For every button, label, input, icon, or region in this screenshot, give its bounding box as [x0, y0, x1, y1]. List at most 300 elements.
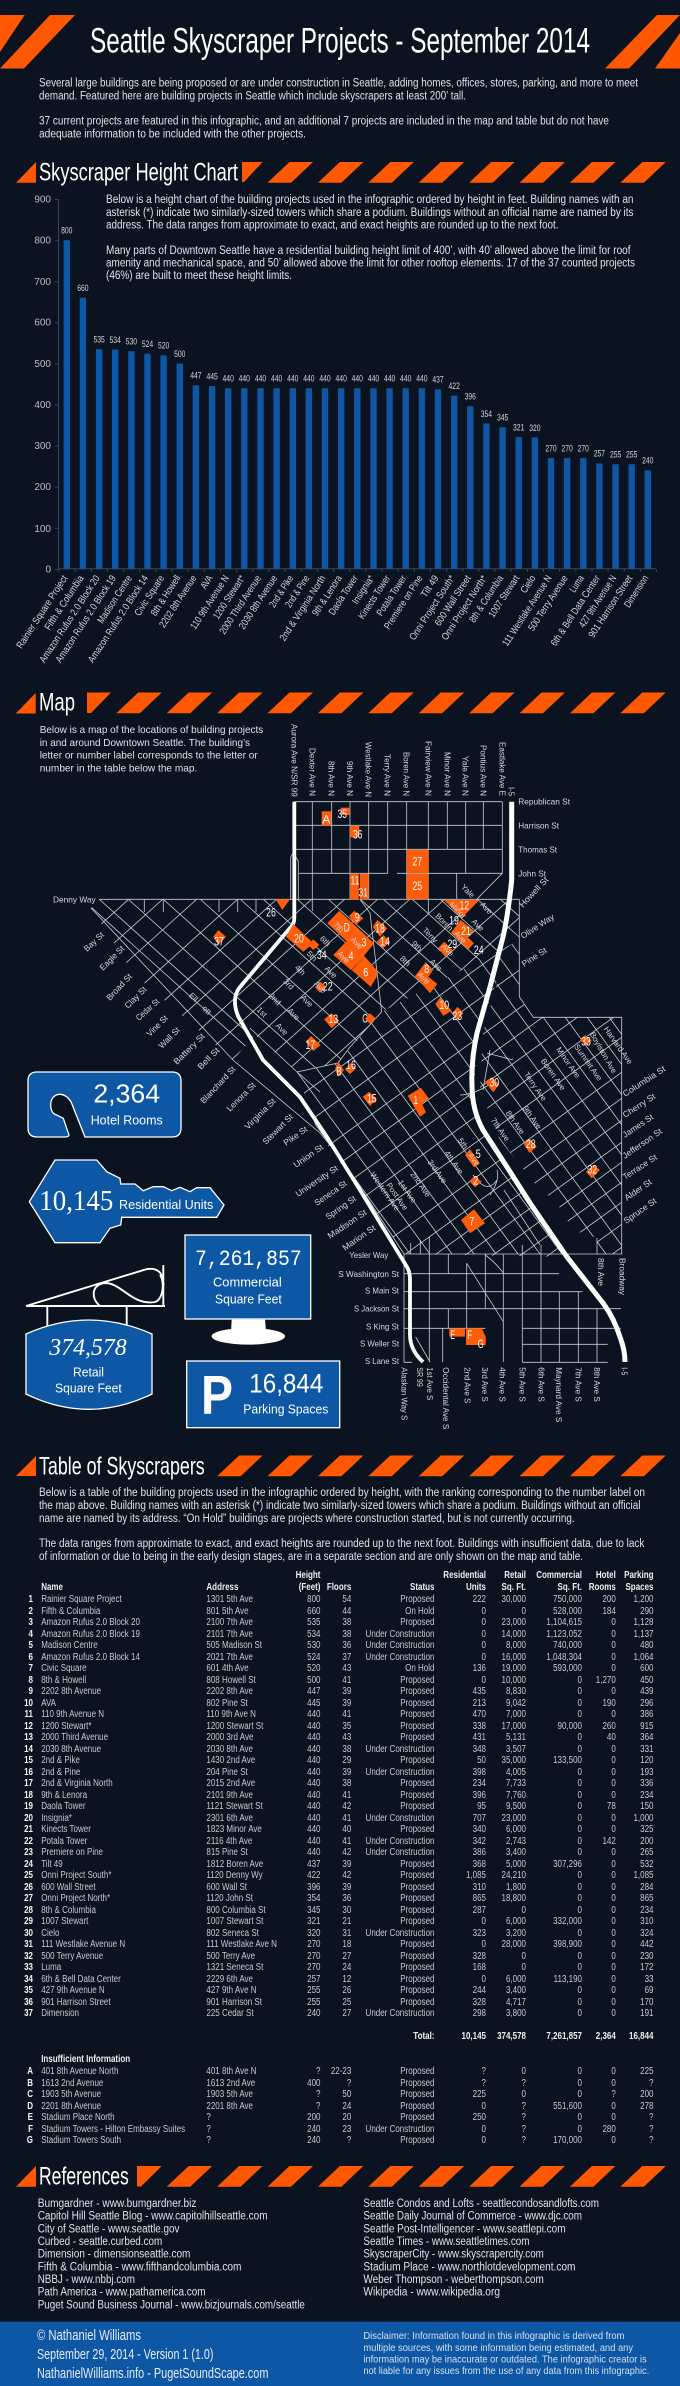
table rows: 37 ranked projects: 534 [307, 1628, 320, 1640]
table rows: 37 ranked projects: 120 [640, 1755, 654, 1766]
rotated project names: 1007 Stewart [487, 573, 522, 620]
table rows: 37 ranked projects: 440 [307, 1801, 320, 1812]
table rows: 37 ranked projects: 332,000 [553, 1916, 582, 1927]
table rows: insufficient information projects: 0 [611, 2112, 616, 2123]
table rows: insufficient information projects: Stadium Towers - Hilton Embassy Suites [41, 2124, 185, 2135]
table rows: 37 ranked projects: Proposed [400, 1755, 434, 1766]
table rows: insufficient information projects: 250 [473, 2112, 486, 2123]
project number labels: 18 [375, 921, 385, 935]
table rows: 37 ranked projects: 801 5th Ave [206, 1606, 249, 1616]
north street labels [289, 724, 571, 969]
avenue labels along the grid: Ave [312, 979, 328, 996]
table rows: 37 ranked projects: 24 [342, 1962, 351, 1973]
table rows: 37 ranked projects: 440 [307, 1732, 320, 1743]
south street labels: I-5 [619, 1367, 629, 1376]
table rows: 37 ranked projects: 0 [611, 1882, 616, 1892]
street grid [90, 801, 622, 1363]
table rows: 37 ranked projects: 1,123,052 [546, 1628, 582, 1640]
bar value labels: 440 [336, 374, 347, 384]
y axis [34, 194, 58, 576]
section heading: table: Table of Skyscrapers [39, 1452, 205, 1480]
table rows: 37 ranked projects: 30,000 [502, 1594, 526, 1605]
table rows: 37 ranked projects: 600 Wall St [206, 1882, 247, 1892]
table rows: 37 ranked projects: On Hold [405, 1606, 434, 1616]
table rows: 37 ranked projects: 1,270 [596, 1674, 616, 1686]
west street labels: Bell St [195, 1045, 222, 1071]
table header row: Residential [443, 1570, 486, 1581]
table rows: 37 ranked projects: 255 [307, 1985, 320, 1996]
stat: hotel rooms door hanger: Hotel Rooms [91, 1112, 163, 1127]
table rows: 37 ranked projects: 23,000 [502, 1812, 526, 1824]
rotated project names: 1200 Stewart* [211, 574, 248, 622]
table rows: 37 ranked projects: 0 [611, 1824, 616, 1835]
bar chart: skyscraper heights [15, 194, 657, 665]
table rows: 37 ranked projects: 2301 6th Ave [206, 1812, 253, 1824]
table header row: Parking [624, 1570, 654, 1581]
table rows: 37 ranked projects: 15 [24, 1755, 33, 1766]
rotated project names: 9th & Lenora [310, 573, 345, 618]
stat: retail square feet sign: Square Feet [55, 1381, 122, 1396]
project number labels: 33 [581, 1035, 591, 1049]
south street labels: 5th Ave S [517, 1367, 527, 1402]
table rows: 37 ranked projects: 0 [611, 1778, 616, 1789]
table rows: 37 ranked projects: 1,104,615 [546, 1617, 582, 1628]
table rows: 37 ranked projects: 38 [342, 1617, 351, 1628]
table rows: 37 ranked projects: 8th & Columbia [41, 1904, 96, 1916]
project number labels: A [322, 812, 330, 826]
stat: parking spaces sign: P [201, 1364, 233, 1426]
north street labels: Westlake Ave N [364, 742, 374, 797]
north street labels: Aurora Ave N/SR 99 [289, 724, 299, 797]
project number labels: D [344, 920, 350, 934]
stat: commercial square feet monitor: Commercial [213, 1275, 282, 1290]
table rows: insufficient information projects: 0 [522, 2089, 526, 2100]
table rows: 37 ranked projects: 1,128 [633, 1617, 654, 1628]
table rows: 37 ranked projects: 535 [307, 1617, 320, 1628]
avenue labels along the grid: Summit Ave [572, 1043, 604, 1083]
project number labels: 30 [489, 1076, 499, 1090]
table rows: 37 ranked projects: 2000 Third Avenue [41, 1732, 108, 1743]
table rows: 37 ranked projects: AVA [41, 1698, 56, 1708]
table rows: 37 ranked projects: 39 [342, 1686, 351, 1697]
table rows: 37 ranked projects: 435 [473, 1686, 486, 1697]
table rows: 37 ranked projects: 440 [307, 1836, 320, 1846]
bar value labels: 535 [93, 334, 105, 345]
west street labels: S Washington St [338, 1269, 400, 1279]
table rows: 37 ranked projects: 500 [307, 1674, 320, 1686]
table rows: 37 ranked projects: 41 [342, 1790, 351, 1800]
rotated project names: 2030 8th Avenue [237, 573, 280, 632]
table rows: 37 ranked projects: 2100 7th Ave [206, 1617, 253, 1628]
table rows: 37 ranked projects: 0 [578, 1812, 582, 1824]
table rows: 37 ranked projects: Proposed [400, 1686, 434, 1697]
table rows: 37 ranked projects: 19,000 [502, 1663, 526, 1674]
footer credits: © Nathaniel Williams [37, 2327, 141, 2344]
table header row: Sq. Ft. [558, 1582, 582, 1593]
table rows: 37 ranked projects: 0 [611, 1744, 616, 1754]
table rows: 37 ranked projects: 1812 Boren Ave [206, 1858, 263, 1870]
table rows: insufficient information projects: G [27, 2135, 33, 2146]
south street labels [399, 1367, 629, 1430]
project number labels: E [450, 1328, 455, 1342]
table rows: 37 ranked projects: 225 Cedar St [206, 2008, 254, 2019]
table rows: 37 ranked projects: 29 [24, 1916, 33, 1927]
table rows: 37 ranked projects: 0 [611, 1893, 616, 1904]
table rows: 37 ranked projects: 7,760 [506, 1790, 526, 1800]
table rows: 37 ranked projects: Under Construction [366, 1928, 434, 1938]
table rows: 37 ranked projects: 20 [24, 1812, 33, 1824]
avenue labels along the grid: Boylston Ave [588, 1031, 619, 1075]
footer disclaimer: multiple sources, with some information being estimated, and any [363, 2342, 634, 2354]
table rows: 37 ranked projects: 2,743 [506, 1836, 526, 1846]
table subheading: insufficient information: Insufficient Information [41, 2054, 130, 2065]
table rows: 37 ranked projects: 901 Harrison Street [41, 1996, 111, 2008]
bar value labels: 422 [449, 381, 460, 392]
table rows: 37 ranked projects: 0 [578, 1790, 582, 1800]
table rows: insufficient information projects: 0 [578, 2124, 582, 2135]
avenue labels along the grid: Terry [421, 926, 440, 945]
table rows: 37 ranked projects: 600 [640, 1663, 654, 1674]
table rows: insufficient information projects: ? [206, 2135, 211, 2146]
y axis: 0 [45, 564, 51, 576]
table rows: 37 ranked projects: 0 [482, 1916, 486, 1927]
table rows: insufficient information projects: ? [649, 2124, 654, 2135]
table rows: 37 ranked projects: 528,000 [553, 1606, 582, 1616]
table rows: insufficient information projects: Proposed [400, 2089, 434, 2100]
rotated project names: Potala Tower [375, 573, 410, 618]
table rows: 37 ranked projects: 3,200 [506, 1928, 526, 1938]
rotated project names: Insignia* [350, 574, 377, 606]
north street labels: Republican St [518, 797, 571, 807]
table rows: insufficient information projects: 401 8th Ave N [206, 2066, 257, 2077]
bar value labels: 440 [400, 374, 411, 384]
bar value labels: 440 [352, 374, 363, 384]
table rows: 37 ranked projects: 601 4th Ave [206, 1663, 249, 1674]
table rows: 37 ranked projects: 234 [473, 1778, 486, 1789]
table rows: 37 ranked projects: 28 [24, 1904, 33, 1916]
intro text [39, 78, 639, 140]
project number labels: 13 [328, 1012, 338, 1026]
south street labels: 3rd Ave S [480, 1367, 490, 1402]
bar value labels: 440 [223, 374, 234, 384]
table rows: 37 ranked projects: 111 Westlake Ave N [206, 1939, 277, 1950]
table rows: 37 ranked projects: 22 [24, 1836, 33, 1846]
table rows: 37 ranked projects: 0 [482, 1617, 486, 1628]
table rows: 37 ranked projects: 2202 8th Avenue [41, 1686, 101, 1697]
map description text: Below is a map of the locations of building projects [40, 724, 263, 736]
intro text: 37 current projects are featured in this infographic, and an additional 7 projects are included in the map and table but do not have [39, 116, 609, 128]
table rows: 37 ranked projects: 26 [24, 1882, 33, 1892]
table rows: 37 ranked projects: Amazon Rufus 2.0 Block 14 [41, 1652, 140, 1662]
north street labels: Yale Ave N [461, 756, 471, 796]
table rows: 37 ranked projects: 1200 Stewart* [41, 1720, 91, 1732]
table rows: insufficient information projects: ? [316, 2066, 320, 2077]
project number labels: 1 [413, 1093, 418, 1107]
project number labels: 3 [362, 936, 367, 950]
stat: parking spaces sign: 16,844 [249, 1369, 323, 1399]
table rows: 37 ranked projects: Proposed [400, 1858, 434, 1870]
avenue labels along the grid: Ave [452, 929, 468, 946]
avenue labels along the grid: Ave [439, 942, 456, 959]
table header row: Retail [504, 1570, 526, 1581]
table rows: insufficient information projects: ? [206, 2124, 211, 2135]
bar value labels: 660 [77, 283, 89, 294]
east street labels: Alder St [622, 1176, 654, 1203]
table rows: insufficient information projects: 24 [342, 2101, 351, 2112]
table rows: 37 ranked projects: 39 [342, 1858, 351, 1870]
table totals row: 10,145 [462, 2031, 486, 2042]
table rows: 37 ranked projects: 8 [29, 1674, 33, 1686]
table rows: 37 ranked projects: 422 [307, 1870, 320, 1881]
table header row: Units [466, 1582, 486, 1593]
table rows: 37 ranked projects: 23,000 [502, 1617, 526, 1628]
table rows: 37 ranked projects: 18 [342, 1939, 351, 1950]
avenue labels along the grid: 3rd Ave [426, 1158, 449, 1186]
avenue labels along the grid [187, 883, 635, 1213]
avenue labels along the grid: Terry Ave [522, 1070, 549, 1103]
table rows: 37 ranked projects: Under Construction [366, 1847, 434, 1858]
table rows: 37 ranked projects: 244 [473, 1985, 486, 1996]
rotated project names: Madison Centre [96, 573, 135, 626]
table rows: insufficient information projects: 240 [307, 2124, 320, 2135]
y axis: 200 [34, 482, 51, 493]
table rows: insufficient information projects: Proposed [400, 2078, 434, 2089]
references right column: SkyscraperCity - www.skyscrapercity.com [363, 2249, 544, 2261]
table rows: insufficient information projects: 0 [578, 2089, 582, 2100]
south street labels: Alaskan Way S [399, 1367, 409, 1421]
table rows: 37 ranked projects: 440 [307, 1720, 320, 1732]
table rows: 37 ranked projects: 34 [24, 1974, 33, 1984]
stat: retail square feet sign: Retail [73, 1365, 104, 1380]
table rows: 37 ranked projects: 168 [473, 1962, 486, 1973]
project number labels: 5 [476, 1147, 481, 1161]
table rows: 37 ranked projects: 35 [342, 1720, 351, 1732]
avenue labels along the grid: Harvard Ave [602, 1025, 635, 1067]
table rows: 37 ranked projects: 27 [342, 2008, 351, 2019]
section heading: table [16, 1452, 666, 1480]
intro text: adequate information to be included with the other projects. [39, 128, 306, 140]
stat: retail square feet sign: 374,578 [48, 1335, 127, 1361]
avenue labels along the grid: Ave [415, 970, 432, 987]
table rows: 37 ranked projects: 111 Westlake Avenue N [41, 1939, 125, 1950]
table rows: 37 ranked projects: Amazon Rufus 2.0 Block 19 [41, 1628, 140, 1640]
table rows: 37 ranked projects: 37 [342, 1652, 351, 1662]
bar value labels [61, 226, 653, 467]
table rows: 37 ranked projects: 2 [29, 1606, 33, 1616]
table rows: 37 ranked projects: 6 [29, 1652, 33, 1662]
table rows: 37 ranked projects: Cielo [41, 1928, 59, 1938]
avenue labels along the grid: ott [200, 1004, 214, 1017]
south street labels: 8th Ave S [592, 1367, 602, 1402]
section heading: height chart [16, 158, 666, 186]
rotated project names: 111 Westlake Avenue N [501, 574, 555, 648]
table rows: 37 ranked projects: 0 [611, 1939, 616, 1950]
bar value labels: 257 [594, 449, 605, 460]
table rows: 37 ranked projects: 398 [473, 1766, 486, 1778]
table rows: 37 ranked projects: 41 [342, 1709, 351, 1720]
table rows: 37 ranked projects: Under Construction [366, 1652, 434, 1662]
references right column [363, 2198, 599, 2299]
table rows: 37 ranked projects: 0 [578, 1893, 582, 1904]
bar value labels: 240 [642, 456, 653, 467]
avenue labels along the grid: Minor [448, 900, 468, 921]
table rows: 37 ranked projects: 5,000 [506, 1858, 526, 1870]
table rows: 37 ranked projects: Proposed [400, 1594, 434, 1605]
table rows: 37 ranked projects: 1,000 [633, 1812, 654, 1824]
table rows: insufficient information projects: 400 [307, 2078, 320, 2089]
table rows: insufficient information projects: 225 [473, 2089, 486, 2100]
table rows: 37 ranked projects: 24 [24, 1858, 33, 1870]
table rows: 37 ranked projects: 440 [307, 1824, 320, 1835]
table rows: insufficient information projects: 23 [342, 2124, 351, 2135]
table rows: 37 ranked projects: 328 [473, 1996, 486, 2008]
table rows: insufficient information projects: ? [522, 2124, 526, 2135]
table rows: insufficient information projects: 0 [482, 2124, 486, 2135]
table header row: Address [206, 1582, 238, 1593]
avenue labels along the grid: 8th Ave [504, 1109, 527, 1136]
table rows: 37 ranked projects: 35,000 [502, 1755, 526, 1766]
table rows: 37 ranked projects: 1301 5th Ave [206, 1594, 253, 1605]
table rows: 37 ranked projects: 0 [578, 1904, 582, 1916]
bar value labels: 534 [110, 335, 121, 346]
west street labels: Seneca St [312, 1178, 349, 1208]
bar value labels: 440 [303, 374, 315, 384]
table rows: 37 ranked projects: Proposed [400, 1709, 434, 1720]
table rows: insufficient information projects: Under Construction [366, 2124, 434, 2135]
table header row: Status [410, 1582, 434, 1593]
table rows: 37 ranked projects: Rainier Square Project [41, 1594, 122, 1605]
table rows: 37 ranked projects: 0 [611, 1858, 616, 1870]
avenue labels along the grid: 6th [318, 934, 332, 948]
avenue labels along the grid: Ave [470, 917, 486, 934]
bar value labels: 530 [126, 336, 137, 348]
map description text: letter or number label corresponds to the letter or [40, 750, 258, 762]
west street labels: Battery St [171, 1031, 207, 1066]
table rows: 37 ranked projects: 800 [307, 1594, 320, 1605]
table rows: 37 ranked projects: 30 [342, 1904, 351, 1916]
avenue labels along the grid: Boren Ave [539, 1057, 568, 1093]
south street labels: 7th Ave S [573, 1367, 583, 1402]
avenue labels along the grid: 7th Ave [489, 1116, 512, 1143]
table description text: name are named by its address. “On Hold” buildings are projects where construction started, but is not currently occurring. [39, 1513, 575, 1525]
bar value labels: 445 [206, 371, 218, 382]
table rows: 37 ranked projects: 354 [307, 1893, 320, 1904]
table rows: 37 ranked projects: 368 [473, 1858, 486, 1870]
table rows: 37 ranked projects: 110 9th Ave N [206, 1709, 256, 1720]
table rows: 37 ranked projects: 0 [578, 1950, 582, 1962]
avenue labels along the grid: 2nd [267, 991, 283, 1007]
table rows: 37 ranked projects: Amazon Rufus 2.0 Block 20 [41, 1617, 140, 1628]
project number labels: 15 [367, 1091, 377, 1105]
table rows: insufficient information projects: E [28, 2112, 33, 2123]
north street labels: 9th Ave N [345, 761, 355, 796]
table rows: 37 ranked projects: Premiere on Pine [41, 1847, 103, 1858]
north street labels: Fairview Ave N [423, 741, 433, 796]
east street labels: Broadway [617, 1258, 627, 1296]
table rows: 37 ranked projects: 11 [25, 1709, 33, 1720]
project number labels: 27 [412, 855, 422, 869]
y axis: 400 [34, 400, 51, 411]
table rows: 37 ranked projects: 800 Columbia St [206, 1904, 266, 1916]
table rows: 37 ranked projects: Under Construction [366, 1836, 434, 1846]
table rows: 37 ranked projects: 1007 Stewart [41, 1916, 88, 1927]
table rows: 37 ranked projects: Proposed [400, 1824, 434, 1835]
table rows: 37 ranked projects: 0 [611, 1974, 616, 1984]
table rows: 37 ranked projects: 1,085 [633, 1870, 654, 1881]
table rows: 37 ranked projects: 1321 Seneca St [206, 1962, 263, 1973]
north street labels: Minor Ave N [442, 752, 452, 796]
table rows: insufficient information projects: ? [522, 2101, 526, 2112]
table rows: 37 ranked projects: Kinects Tower [41, 1824, 91, 1835]
table rows: 37 ranked projects: 0 [611, 2008, 616, 2019]
table rows: 37 ranked projects: 0 [611, 1652, 616, 1662]
table rows: insufficient information projects: 225 [640, 2066, 654, 2077]
project number labels: 7 [469, 1214, 474, 1228]
table rows: 37 ranked projects: 2021 7th Ave [206, 1652, 253, 1662]
table rows: 37 ranked projects: 78 [607, 1801, 616, 1812]
project number labels: 11 [350, 874, 360, 888]
table rows: 37 ranked projects: 0 [611, 1766, 616, 1778]
table rows: 37 ranked projects: 113,190 [554, 1974, 582, 1984]
table rows: 37 ranked projects: 0 [578, 1985, 582, 1996]
table rows: 37 ranked projects: 2015 2nd Ave [206, 1778, 255, 1789]
table rows: 37 ranked projects: 234 [640, 1790, 654, 1800]
table rows: 37 ranked projects: Proposed [400, 1698, 434, 1708]
west street labels: Bay St [82, 929, 106, 953]
table rows: insufficient information projects: 20 [342, 2112, 351, 2123]
y axis: 500 [34, 359, 51, 370]
table rows: 37 ranked projects: 815 Pine St [206, 1847, 248, 1858]
table rows: 37 ranked projects: 440 [307, 1778, 320, 1789]
bar value labels: 440 [271, 374, 282, 384]
table rows: 37 ranked projects: 4,717 [506, 1996, 526, 2008]
avenue labels along the grid: Ave [335, 949, 352, 966]
project number labels: 21 [461, 924, 471, 938]
table rows: 37 ranked projects: 38 [342, 1778, 351, 1789]
references right column: Wikipedia - www.wikipedia.org [363, 2287, 500, 2299]
table rows: insufficient information projects: 0 [482, 2101, 486, 2112]
references left column: NBBJ - www.nbbj.com [38, 2274, 135, 2286]
table rows: 37 ranked projects: 10 [24, 1698, 33, 1708]
table rows: insufficient information projects: 1613 2nd Avenue [41, 2078, 103, 2089]
table rows: insufficient information projects: 0 [578, 2078, 582, 2089]
header stripes [0, 15, 680, 68]
table rows: 37 ranked projects: 170 [640, 1996, 654, 2008]
table rows: 37 ranked projects: 328 [473, 1950, 486, 1962]
table rows: 37 ranked projects: 296 [640, 1698, 654, 1708]
table rows: 37 ranked projects: 0 [611, 1962, 616, 1973]
table rows: 37 ranked projects: 257 [307, 1974, 320, 1984]
table rows: insufficient information projects: 2201 8th Ave [206, 2101, 253, 2112]
bar value labels: 270 [545, 443, 557, 454]
table rows: 37 ranked projects: 255 [307, 1996, 320, 2008]
project number labels: 32 [587, 1162, 597, 1176]
bar value labels: 440 [319, 374, 331, 384]
table rows: 37 ranked projects: 54 [342, 1594, 351, 1605]
stat: parking spaces sign: Parking Spaces [243, 1401, 329, 1416]
table rows: 37 ranked projects: 6,000 [506, 1974, 526, 1984]
table rows: 37 ranked projects: Potala Tower [41, 1836, 87, 1846]
west street labels: Madison St [326, 1207, 369, 1241]
table rows: 37 ranked projects: 136 [473, 1663, 486, 1674]
table rows: 37 ranked projects: 26 [342, 1985, 351, 1996]
table rows: 37 ranked projects: 50 [477, 1755, 486, 1766]
table rows: 37 ranked projects: 808 Howell St [206, 1674, 256, 1686]
table rows: 37 ranked projects: 342 [473, 1836, 486, 1846]
avenue labels along the grid: 5th [305, 949, 319, 963]
rotated project names: 8th & Columbia [467, 573, 506, 625]
project number labels: 4 [348, 949, 354, 963]
